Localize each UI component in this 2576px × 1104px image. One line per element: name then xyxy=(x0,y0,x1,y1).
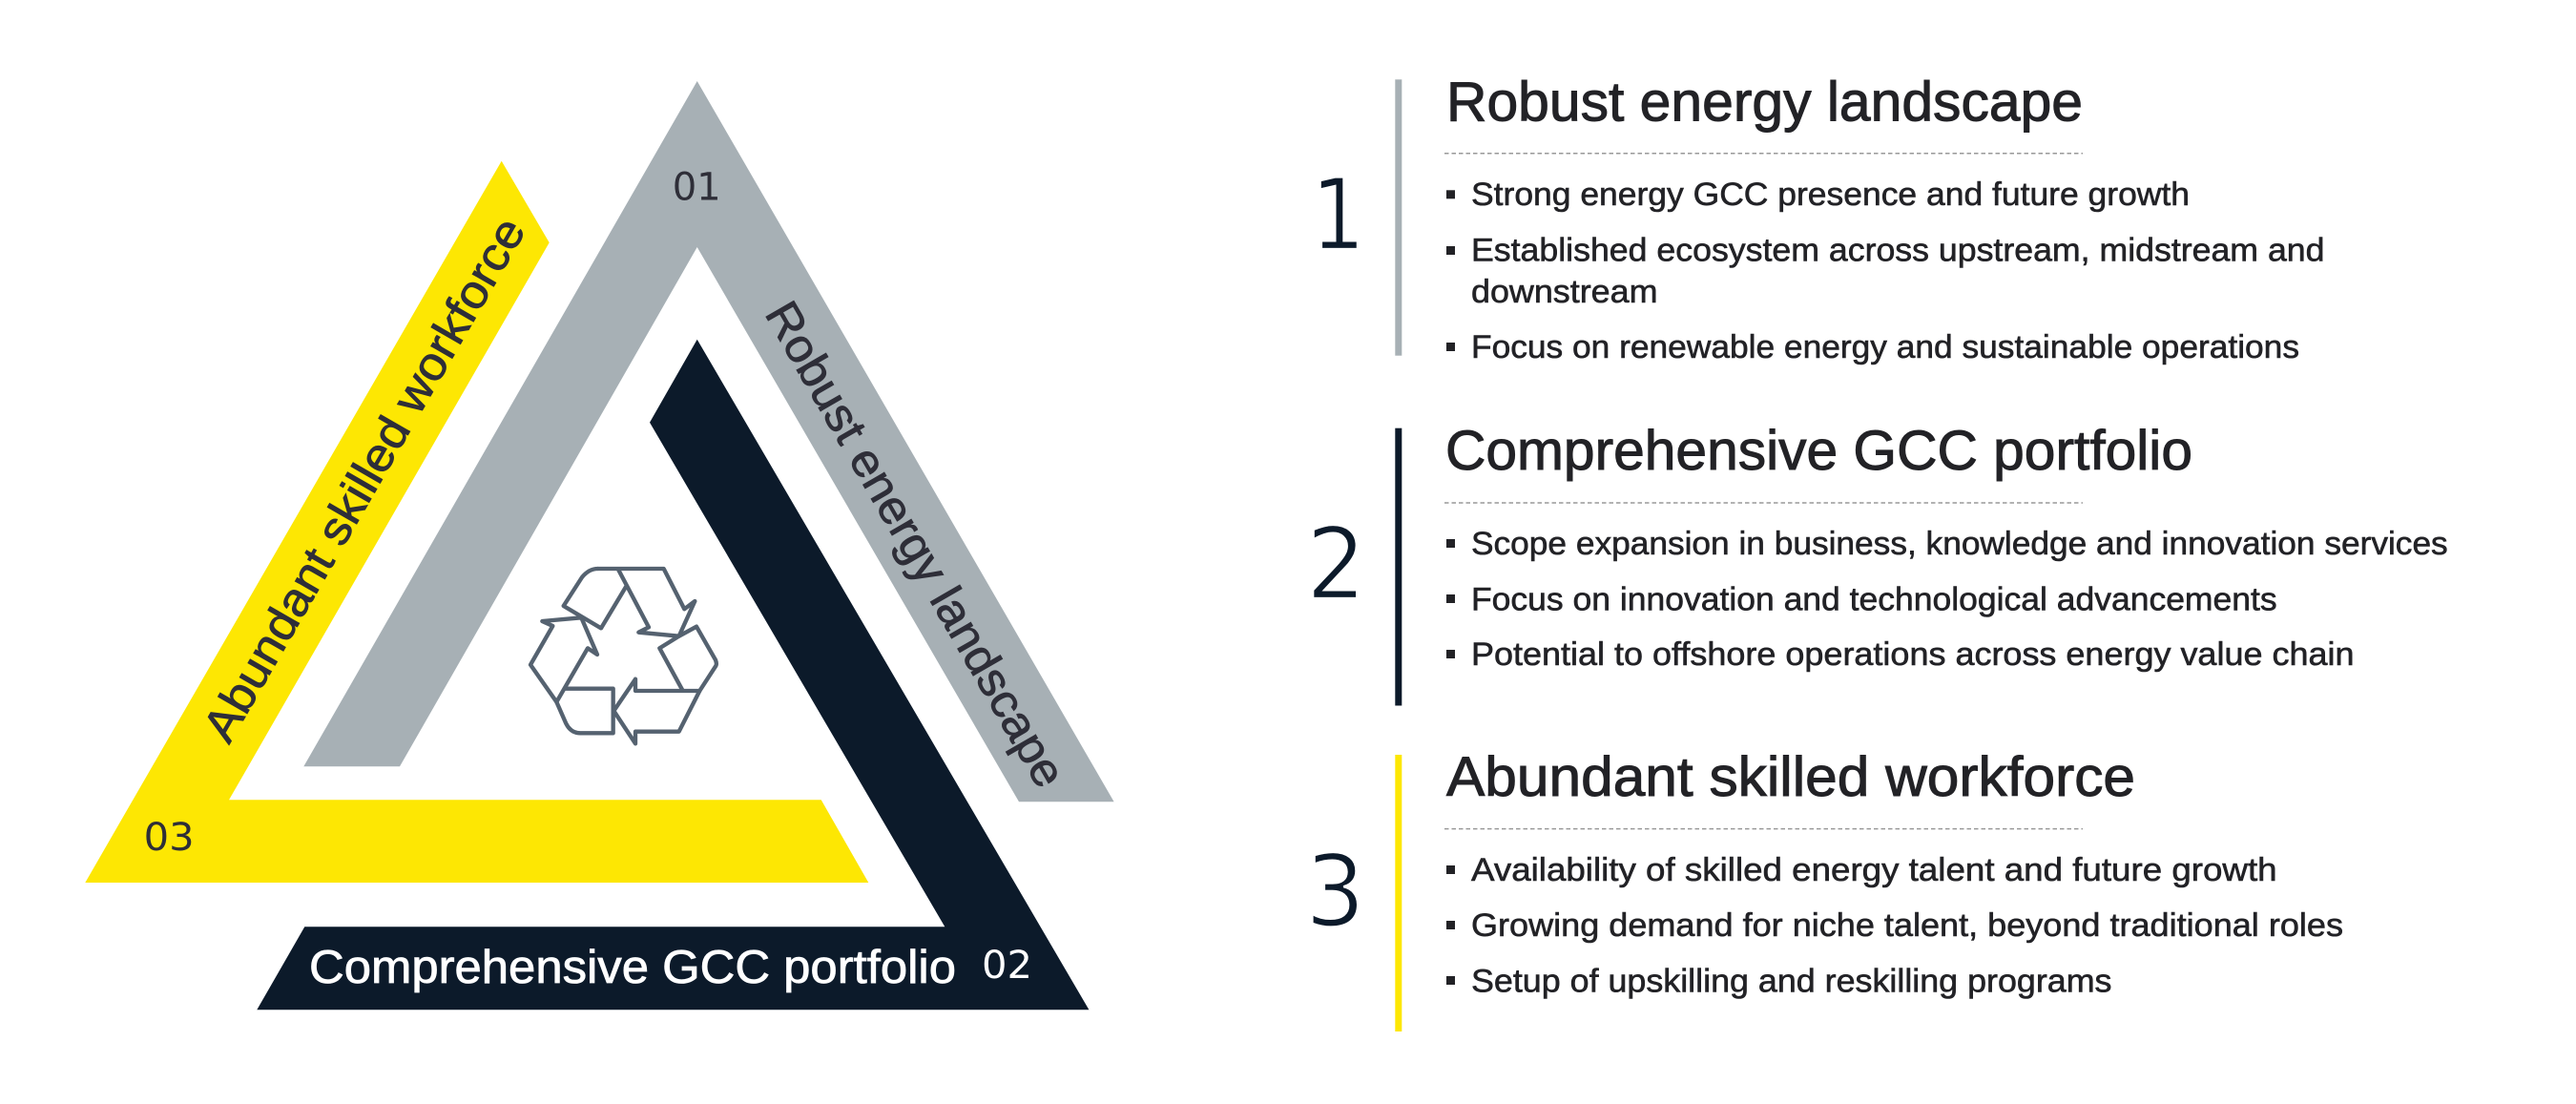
numeral 1: 1 xyxy=(1311,158,1365,273)
bullet list xyxy=(1446,526,2448,673)
bullet list: Focus on renewable energy and sustainable operations xyxy=(1471,329,2299,365)
bullet list xyxy=(1446,177,2324,365)
bullet list: Scope expansion in business, knowledge and innovation services xyxy=(1471,526,2448,562)
bullet list: Setup of upskilling and reskilling programs xyxy=(1471,964,2112,1000)
panel: section 1 robust energy landscape xyxy=(1311,72,2324,365)
panel: grey band robust energy landscape xyxy=(303,81,1114,802)
panel: section 2 comprehensive GCC portfolio xyxy=(1306,420,2448,706)
number 01: 01 xyxy=(673,165,721,209)
bullet list: Strong energy GCC presence and future growth xyxy=(1471,177,2190,213)
accent bar yellow xyxy=(1395,755,1402,1031)
label: comprehensive GCC portfolio: Comprehensive GCC portfolio xyxy=(309,942,956,993)
bullet list xyxy=(1446,852,2343,1000)
panel: yellow band abundant skilled workforce xyxy=(85,161,868,883)
numeral 3: 3 xyxy=(1305,835,1365,949)
icon: recycling arrows xyxy=(530,569,717,743)
accent bar grey xyxy=(1395,79,1402,356)
label: robust energy landscape: Robust energy landscape xyxy=(755,293,1075,796)
label: abundant skilled workforce: Abundant skilled workforce xyxy=(194,209,536,750)
heading: Abundant skilled workforce xyxy=(1446,746,2135,808)
accent bar navy xyxy=(1395,428,1402,706)
number 03: 03 xyxy=(144,816,195,860)
bullet list: Focus on innovation and technological advancements xyxy=(1471,582,2277,618)
number 02: 02 xyxy=(982,944,1032,988)
panel: section 3 abundant skilled workforce xyxy=(1305,746,2343,1031)
panel: navy band comprehensive GCC portfolio xyxy=(257,340,1089,1010)
numeral 2: 2 xyxy=(1306,508,1366,622)
bullet list: Growing demand for niche talent, beyond traditional roles xyxy=(1471,907,2343,944)
triangle diagram xyxy=(85,81,1114,1010)
bullet list: downstream xyxy=(1471,274,1658,310)
heading: Robust energy landscape xyxy=(1446,72,2083,134)
bullet list: Availability of skilled energy talent and future growth xyxy=(1471,852,2277,888)
heading: Comprehensive GCC portfolio xyxy=(1445,420,2192,482)
bullet list: Established ecosystem across upstream, midstream and xyxy=(1471,233,2324,269)
bullet list: Potential to offshore operations across energy value chain xyxy=(1471,636,2355,673)
